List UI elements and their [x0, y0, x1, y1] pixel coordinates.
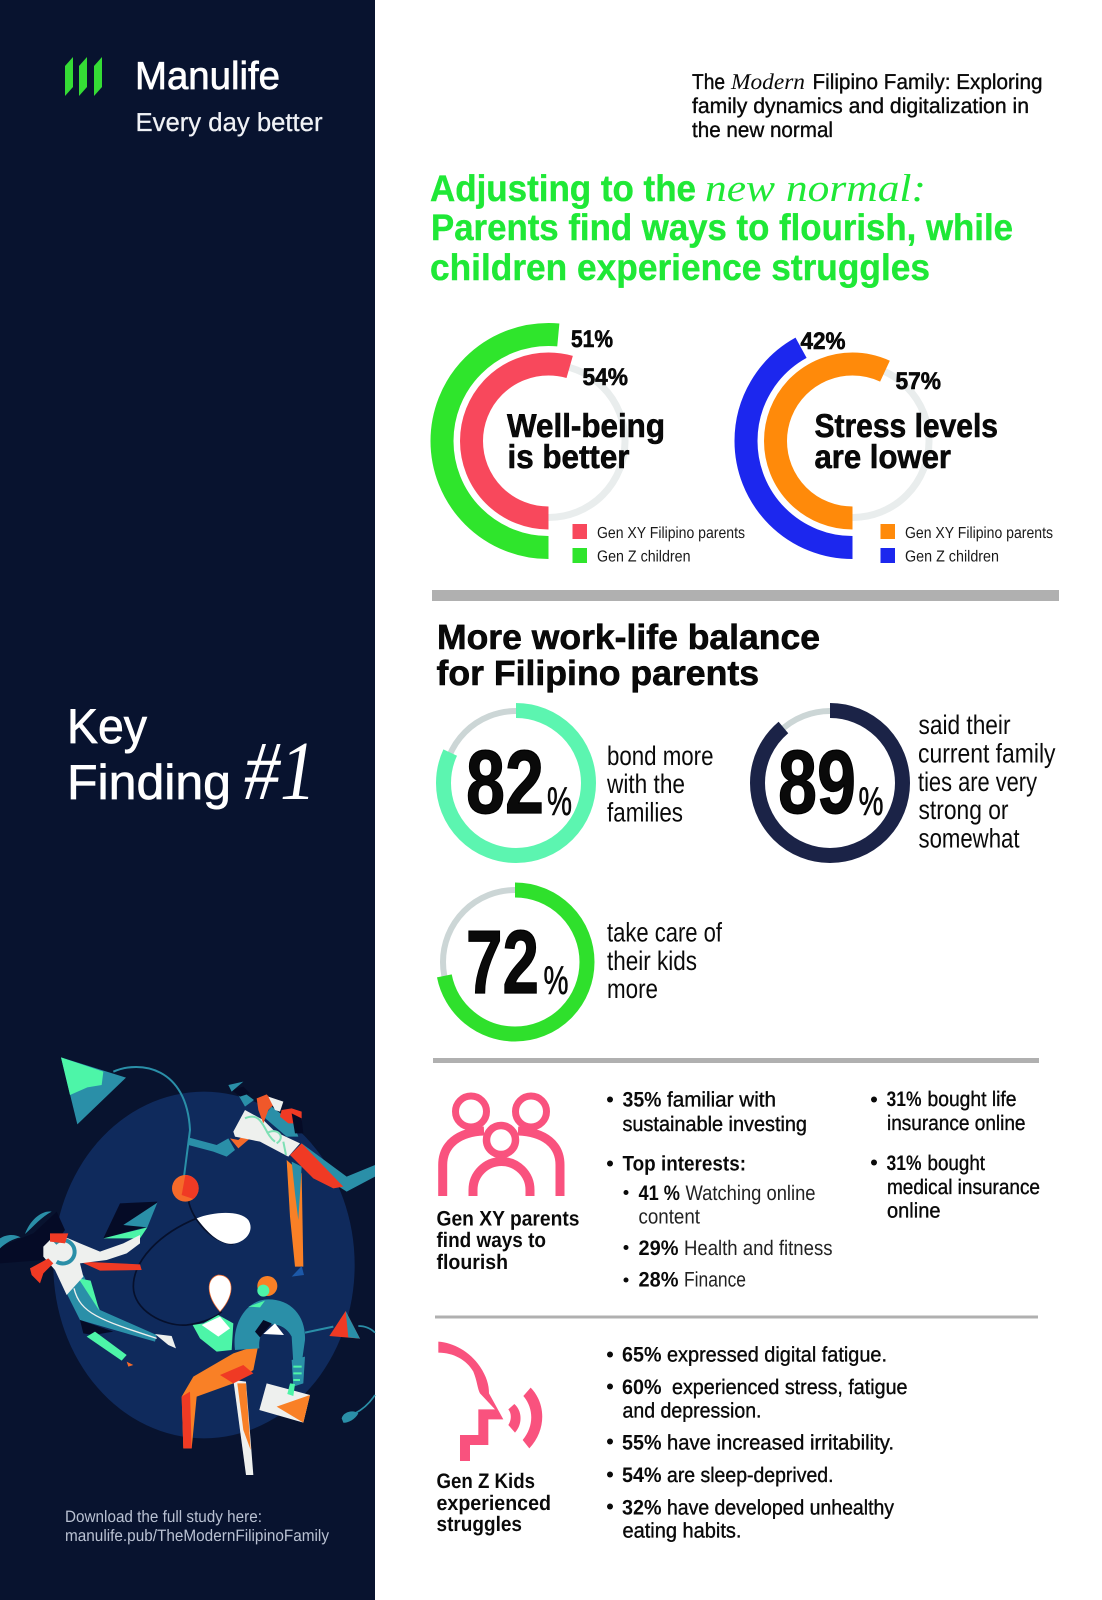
bullet list: online insurance [871, 1088, 1040, 1222]
logo: Manulife [65, 55, 323, 137]
stat ring: 72%: % [544, 959, 568, 1003]
value labels: 54% [582, 364, 628, 391]
report title: Filipino Family: Exploring [812, 70, 1042, 94]
chart: stress levels donut [746, 328, 1053, 566]
bullet list: struggles: expressed digital fatigue. [667, 1344, 887, 1366]
value labels: 42% [800, 328, 846, 355]
bullet list: online insurance: bought life [928, 1088, 1016, 1111]
bullet list: struggles: have increased irritability. [667, 1432, 894, 1454]
stat description: take care of [607, 918, 722, 948]
bullet list: struggles: have developed unhealthy [667, 1496, 894, 1520]
stat description: somewhat [918, 824, 1020, 854]
report title: Modern [730, 69, 805, 94]
stat ring: 89% [758, 710, 1056, 856]
donut caption: is better [508, 438, 630, 475]
stat description: said their [918, 710, 1011, 740]
heading: work-life balance: for Filipino parents [436, 654, 759, 693]
heading: Key Finding #1: #1 [244, 725, 316, 818]
download link [65, 1508, 330, 1545]
stat description [606, 741, 714, 828]
heading: Key Finding #1 [67, 700, 316, 818]
report title [692, 69, 1042, 142]
donut caption [814, 407, 998, 475]
figure: bottom with envelope [182, 1276, 375, 1475]
bullet list: online insurance: insurance online [887, 1112, 1026, 1135]
main heading: new normal: [705, 167, 926, 210]
bullet list: interests [607, 1088, 832, 1292]
bullet list: struggles: eating habits. [622, 1520, 742, 1542]
stat description: bond more [607, 741, 714, 771]
donut caption: are lower [814, 438, 951, 475]
donut caption: Well-being [507, 407, 665, 444]
report title: family dynamics and digitalization in [692, 94, 1029, 118]
bullet list: struggles: are sleep-deprived. [667, 1464, 834, 1487]
download link: manulife.pub/TheModernFilipinoFamily [65, 1527, 330, 1545]
legend [880, 524, 1053, 566]
heading: work-life balance [436, 618, 820, 693]
bullet list: online insurance: 31% [886, 1088, 922, 1111]
stat description: current family [918, 738, 1056, 768]
section label [436, 1208, 580, 1274]
bullet list: interests: Watching online [686, 1182, 816, 1205]
triangle kite with string [61, 1057, 190, 1177]
section label: flourish [436, 1251, 508, 1274]
stat ring: 89%: 89 [778, 733, 856, 833]
main heading: Parents find ways to flourish, while [431, 207, 1013, 248]
bullet list: interests: 28% [638, 1268, 679, 1292]
value labels [800, 328, 941, 395]
legend [572, 524, 745, 566]
section: Gen Z kids [436, 1342, 908, 1542]
section label: struggles [436, 1513, 522, 1536]
icon: head with sound waves [438, 1342, 542, 1461]
infinity loop and ball [133, 1175, 251, 1325]
value labels: 51% [571, 326, 613, 353]
figure: left with laptop [0, 1202, 176, 1367]
stat description: families [607, 798, 683, 828]
stat description: ties are very [918, 767, 1037, 797]
section: Gen XY parents [436, 1088, 1040, 1292]
bullet list: interests: 35% [622, 1088, 662, 1112]
stat description: with the [606, 769, 685, 799]
section label: Gen XY parents [436, 1208, 580, 1230]
bullet list: struggles: and depression. [622, 1400, 762, 1422]
donut caption: Stress levels [814, 407, 998, 444]
main heading: Adjusting to the [430, 168, 696, 209]
bullet list: online insurance: online [887, 1200, 940, 1222]
report title: the new normal [692, 118, 833, 142]
stat ring: 82%: 82 [466, 733, 544, 833]
donut caption [507, 407, 665, 475]
bullet list: interests: 29% [638, 1237, 679, 1260]
bullet list: interests: 41 % [638, 1182, 680, 1205]
stat description [607, 918, 722, 1004]
stat ring: 82%: % [547, 780, 572, 824]
bullet list: online insurance: medical insurance [887, 1176, 1040, 1199]
bullet list: online insurance: bought [928, 1152, 985, 1175]
stat description [918, 710, 1056, 854]
icon: three green bars [65, 57, 102, 96]
bullet list: interests: Health and fitness [684, 1237, 832, 1260]
bullet list: interests: Finance [684, 1268, 746, 1292]
brand name: Manulife [135, 55, 280, 98]
panel: dark sidebar [0, 0, 375, 1600]
heading: work-life balance: More work-life balance [437, 618, 820, 657]
stat description: strong or [918, 795, 1008, 825]
bullet list: interests: familiar with [667, 1088, 776, 1112]
heading: Key Finding #1: Finding [67, 756, 231, 810]
main heading: children experience struggles [430, 247, 930, 288]
bullet list: struggles: experienced stress, fatigue [672, 1376, 908, 1399]
icon: family [443, 1096, 560, 1196]
tagline: Every day better [136, 107, 323, 137]
value labels: 57% [896, 368, 941, 395]
legend: Gen Z children [905, 548, 999, 566]
report title: The [692, 70, 725, 94]
main heading [430, 167, 1013, 288]
bullet list: online insurance: 31% [886, 1152, 922, 1175]
bullet list: interests: content [638, 1206, 700, 1228]
stat description: more [607, 974, 658, 1004]
bullet list: struggles: 65% [622, 1344, 662, 1366]
chart: well-being donut [442, 326, 745, 566]
bullet list: struggles: 55% [622, 1432, 662, 1454]
section label [436, 1470, 551, 1536]
value labels [571, 326, 628, 391]
stat description: their kids [607, 946, 697, 976]
bullet list: struggles: 32% [622, 1496, 662, 1520]
figure: top right [188, 1082, 375, 1277]
stat ring: 72% [443, 890, 722, 1034]
bullet list: struggles [607, 1344, 908, 1542]
stat ring: 82% [444, 710, 714, 856]
section label: find ways to [436, 1229, 546, 1252]
illustration: family in motion [0, 1057, 375, 1475]
bullet list: struggles: 60% [622, 1376, 662, 1399]
legend: Gen XY Filipino parents [597, 525, 745, 542]
legend: Gen XY Filipino parents [905, 525, 1053, 542]
download link: Download the full study here: [65, 1508, 262, 1526]
bullet list: struggles: 54% [622, 1464, 662, 1487]
heading: Key Finding #1: Key [67, 700, 147, 754]
bullet list: interests: Top interests: [622, 1152, 746, 1176]
bullet list: interests: sustainable investing [622, 1113, 807, 1136]
section label: experienced [436, 1492, 551, 1515]
legend: Gen Z children [597, 548, 690, 566]
stat ring: 72%: 72 [466, 913, 539, 1013]
stat ring: 89%: % [858, 780, 884, 824]
section label: Gen Z Kids [436, 1470, 535, 1493]
